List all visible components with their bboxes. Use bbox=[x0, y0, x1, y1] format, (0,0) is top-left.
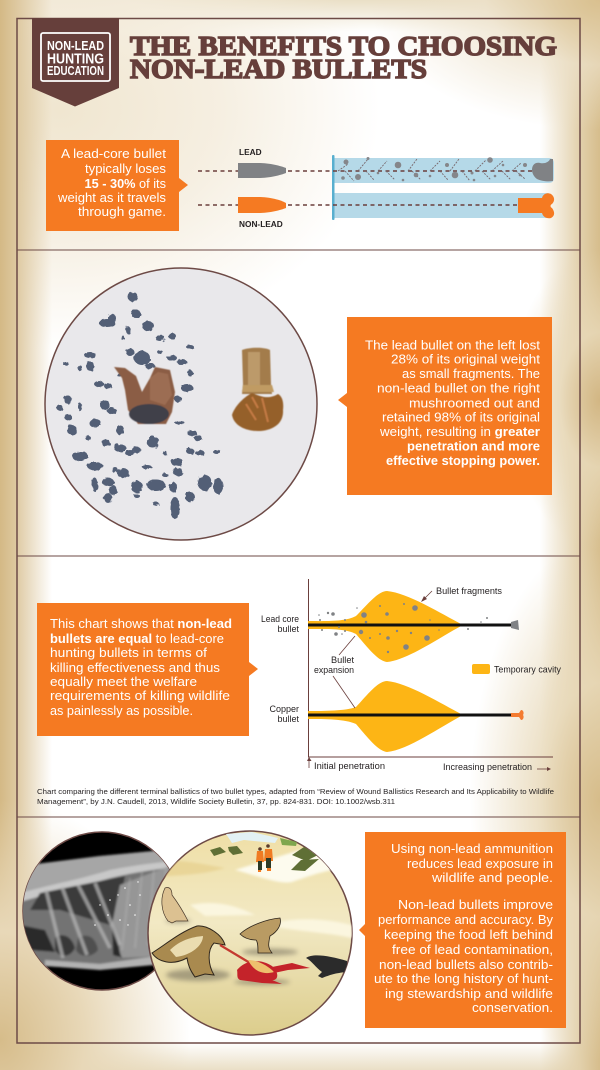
callout: lead-core weight loss bbox=[46, 140, 188, 231]
logo banner: EDUCATION bbox=[47, 64, 104, 78]
title: THE BENEFITS TO CHOOSING bbox=[130, 31, 557, 61]
diagram: bullet paths through tissue bbox=[198, 147, 554, 229]
copper bullet remains bbox=[232, 348, 283, 431]
illustration: eagles scavenging a carcass bbox=[148, 831, 352, 1035]
chart citation bbox=[37, 787, 554, 806]
callout: chart explanation: bullets are equal to lead-core bbox=[50, 631, 224, 646]
chart: terminal ballistics comparison: Bullet fragments bbox=[436, 586, 503, 596]
callout: chart explanation: equally meet the welfare bbox=[50, 674, 197, 689]
fragments bbox=[338, 159, 525, 181]
callout: chart explanation: hunting bullets in terms of bbox=[50, 645, 207, 660]
callout: lead exposure and stewardship: Using non-lead ammunition bbox=[391, 841, 553, 856]
callout: lead exposure and stewardship: ute to the long history of hunt- bbox=[374, 971, 553, 986]
callout: bullet weight retained: mushroomed out and bbox=[409, 395, 540, 410]
callout: lead exposure and stewardship bbox=[359, 832, 566, 1028]
chart: terminal ballistics comparison: Lead core bbox=[261, 614, 299, 624]
title: NON-LEAD BULLETS bbox=[130, 54, 427, 84]
chart: terminal ballistics comparison: Bullet bbox=[331, 655, 355, 665]
fragments bbox=[318, 603, 488, 653]
lead core cavity bbox=[308, 591, 463, 662]
shadows bbox=[165, 919, 298, 985]
callout: lead-core weight loss: weight as it travels bbox=[57, 190, 167, 205]
hunters bbox=[256, 849, 273, 872]
callout: bullet weight retained: 28% of its original weight bbox=[391, 352, 540, 366]
front eagle bbox=[152, 926, 225, 977]
callout: chart explanation bbox=[37, 603, 258, 736]
callout: chart explanation: as painlessly as possible. bbox=[50, 703, 193, 718]
callout: lead exposure and stewardship: keeping the food left behind bbox=[384, 927, 553, 942]
chart citation: Management”, by J.N. Caudell, 2013, Wildlife Society Bulletin, 37, pp. 824-831. DOI: 10.1002/wsb.311 bbox=[37, 797, 395, 806]
chart: terminal ballistics comparison: Initial penetration bbox=[314, 761, 385, 771]
image: chest x-ray with lead fragments bbox=[20, 832, 185, 990]
chart citation: Chart comparing the different terminal ballistics of two bullet types, adapted from “Review of Wound Ballistics Research and Its Applicability to Wildlife bbox=[37, 787, 554, 796]
carcass bbox=[220, 945, 250, 963]
copper cavity bbox=[308, 681, 463, 752]
callout: lead-core weight loss: 15 - 30% of its bbox=[84, 176, 166, 191]
callout: bullet weight retained: non-lead bullet on the right bbox=[377, 381, 540, 396]
callout: lead-core weight loss: A lead-core bullet bbox=[61, 146, 166, 161]
logo banner: NON-LEAD bbox=[47, 39, 104, 53]
chart: terminal ballistics comparison bbox=[261, 579, 561, 772]
callout: bullet weight retained: penetration and more bbox=[407, 439, 540, 454]
pale sand hills bbox=[148, 850, 352, 938]
leader lines bbox=[309, 591, 550, 769]
lead bullet remains bbox=[114, 367, 175, 424]
callout: lead-core weight loss: typically loses bbox=[85, 161, 166, 176]
callout: chart explanation: This chart shows that non-lead bbox=[50, 616, 232, 631]
chart: terminal ballistics comparison: bullet bbox=[277, 624, 299, 634]
callout: bullet weight retained: weight, resulting in greater bbox=[379, 424, 540, 439]
legend bbox=[472, 664, 490, 674]
callout: lead exposure and stewardship: reduces lead exposure in bbox=[407, 856, 553, 871]
chart: terminal ballistics comparison: bullet bbox=[277, 714, 299, 724]
callout: bullet weight retained: as small fragments. The bbox=[402, 366, 540, 381]
callout: lead exposure and stewardship: non-lead bullets also contrib- bbox=[379, 957, 553, 972]
callout: bullet weight retained bbox=[338, 317, 552, 495]
callout: lead exposure and stewardship: performance and accuracy. By bbox=[378, 912, 553, 927]
callout: bullet weight retained: retained 98% of its original bbox=[382, 410, 540, 425]
right eagle bbox=[240, 918, 280, 953]
logo banner: HUNTING bbox=[47, 52, 104, 68]
chart: terminal ballistics comparison: expansion bbox=[314, 665, 354, 675]
logo banner bbox=[32, 18, 119, 106]
far eagle bbox=[162, 887, 188, 923]
photo: recovered bullets on white surface bbox=[45, 268, 317, 540]
title bbox=[130, 31, 557, 84]
callout: lead exposure and stewardship: conservation. bbox=[472, 1000, 553, 1015]
diagram: bullet paths through tissue: LEAD bbox=[239, 147, 262, 157]
callout: lead exposure and stewardship: ing stewardship and wildlife bbox=[385, 986, 553, 1001]
callout: lead exposure and stewardship: Non-lead bullets improve bbox=[398, 897, 553, 912]
raven bbox=[306, 955, 347, 978]
callout: bullet weight retained: effective stopping power. bbox=[386, 453, 540, 468]
callout: lead-core weight loss: through game. bbox=[78, 204, 166, 219]
chart: terminal ballistics comparison: Temporary cavity bbox=[494, 664, 561, 674]
callout: chart explanation: requirements of killing wildlife bbox=[50, 688, 230, 703]
callout: chart explanation: killing effectiveness and thus bbox=[50, 660, 221, 675]
chart: terminal ballistics comparison: Copper bbox=[269, 704, 299, 714]
callout: lead exposure and stewardship: wildlife and people. bbox=[431, 870, 553, 885]
callout: lead exposure and stewardship: free of lead contamination, bbox=[392, 942, 553, 957]
chart: terminal ballistics comparison: Increasing penetration bbox=[443, 762, 532, 772]
diagram: bullet paths through tissue: NON-LEAD bbox=[239, 219, 283, 229]
callout: bullet weight retained: The lead bullet on the left lost bbox=[365, 337, 540, 352]
